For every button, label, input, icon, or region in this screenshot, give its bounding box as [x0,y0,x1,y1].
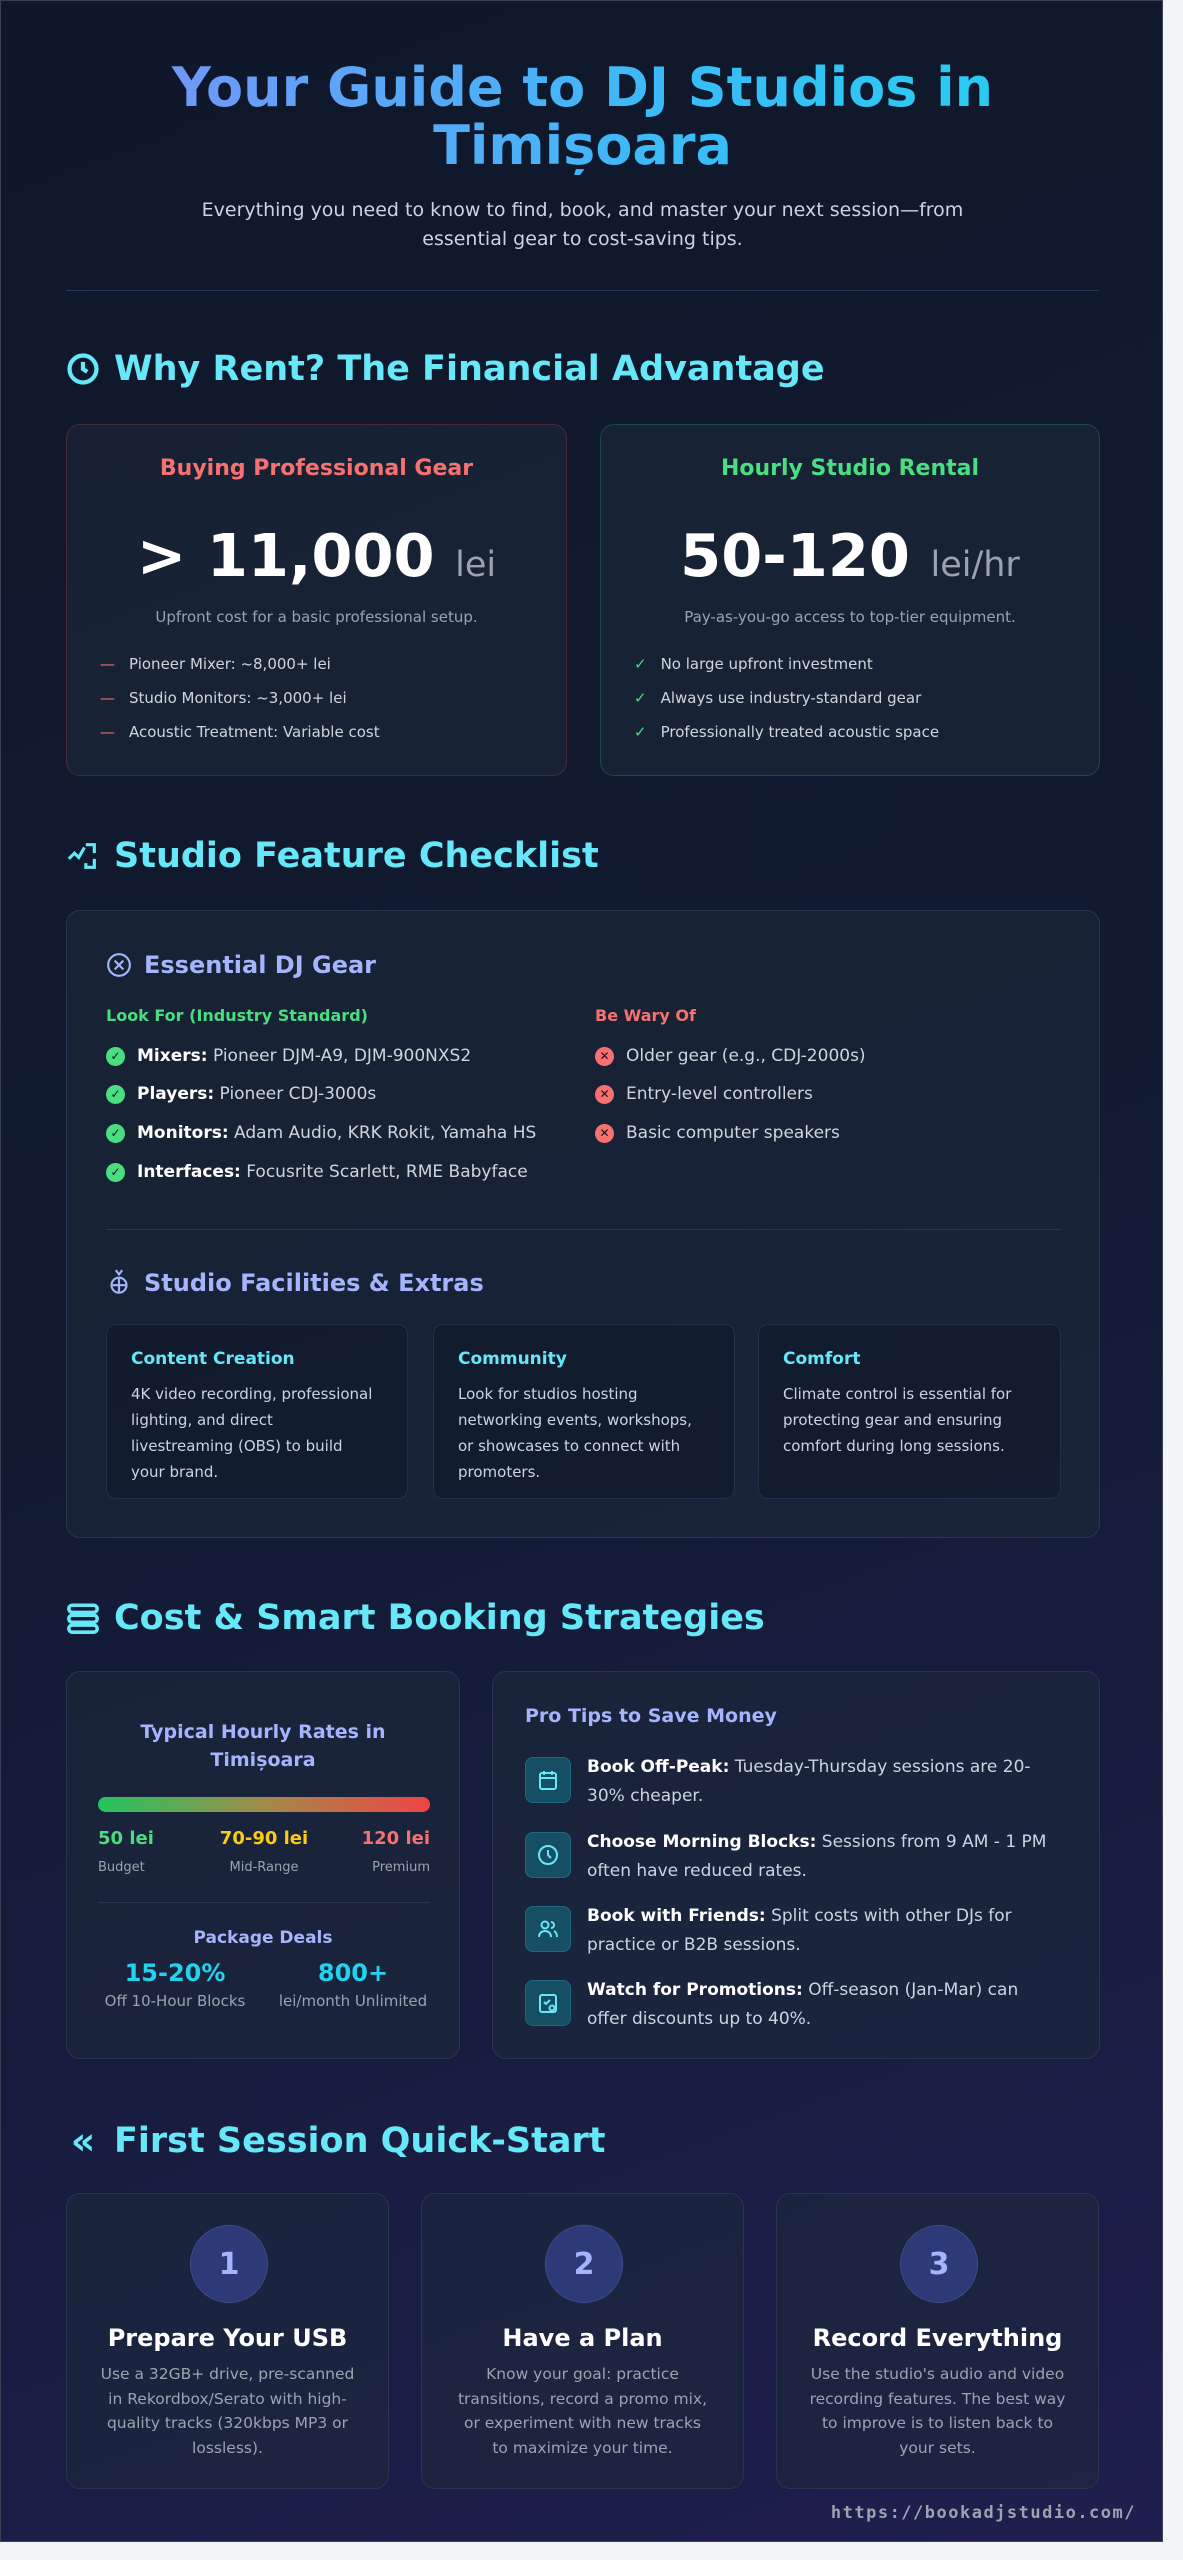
card: comfort: Climate control is essential for [783,1385,1011,1403]
look for column: Monitors: Adam Audio, KRK Rokit, Yamaha HS [137,1123,536,1143]
description: Upfront cost for a basic professional setup. [155,608,478,626]
rate labels: 120 lei [362,1828,430,1849]
be wary column: Basic computer speakers [626,1123,840,1143]
look for column: ✓ [110,1165,121,1179]
description: Pay-as-you-go access to top-tier equipment. [684,608,1016,626]
card title: Buying Professional Gear [160,456,473,481]
step 1 [66,2193,389,2489]
be wary column: Entry-level controllers [626,1084,813,1104]
card: community [433,1324,735,1499]
be wary column: Older gear (e.g., CDJ-2000s) [626,1046,866,1066]
look for column: ✓ [110,1126,121,1140]
card: comfort: comfort during long sessions. [783,1437,1005,1455]
rates title: Timișoara [210,1749,316,1771]
be wary column: ✕ [599,1049,610,1063]
heading: checklist: Studio Feature Checklist [114,836,599,876]
card: community: Look for studios hosting [458,1385,638,1403]
package deals: Package Deals [193,1928,332,1948]
be wary column [595,1006,866,1143]
rates title [140,1721,386,1771]
heading: cost strategies: Cost & Smart Booking Strategies [114,1598,765,1638]
step 1: Use a 32GB+ drive, pre-scanned in Rekordbox/Serato with high-quality tracks (320kbps MP3 or lossless). [101,2365,354,2456]
card: community: Community [458,1349,567,1369]
card title: Hourly Studio Rental [721,456,979,481]
rate labels: 50 lei [98,1828,154,1849]
look for column: Interfaces: Focusrite Scarlett, RME Babyface [137,1162,528,1182]
benefits list: ✓ [634,655,647,673]
benefits list: Always use industry-standard gear [661,689,921,707]
cost list [100,655,380,741]
heading: quick start: « [71,2119,95,2163]
tip: morning: Choose Morning Blocks: Sessions from 9 AM - 1 PM often have reduced rates. [587,1832,1046,1881]
cost list: Acoustic Treatment: Variable cost [129,723,380,741]
title: Timișoara [433,114,732,177]
subtitle: essential gear to cost-saving tips. [422,228,743,250]
panel: buying gear [66,424,567,776]
step 2 [421,2193,744,2489]
step 3: Use the studio's audio and video recording features. The best way to improve is to listen back to your sets. [810,2365,1065,2456]
card: content creation: lighting, and direct [131,1411,273,1429]
step 1: Prepare Your USB [108,2324,347,2352]
be wary column: Be Wary Of [595,1006,696,1025]
big number: > 11,000 lei [137,521,496,590]
card: comfort [758,1324,1061,1499]
card: comfort: protecting gear and ensuring [783,1411,1002,1429]
benefits list: ✓ [634,689,647,707]
cost list: Studio Monitors: ~3,000+ lei [129,689,347,707]
card: community: or showcases to connect with [458,1437,680,1455]
tip: friends: Book with Friends: Split costs with other DJs for practice or B2B sessions. [587,1906,1012,1955]
title: Your Guide to DJ Studios in [172,56,993,119]
card: comfort: Comfort [783,1349,860,1369]
tip: promotions: Watch for Promotions: Off-season (Jan-Mar) can offer discounts up to 40%. [587,1980,1018,2029]
big number: 50-120 lei/hr [680,521,1020,590]
panel: checklist [66,910,1100,1538]
card: community: promoters. [458,1463,540,1481]
rates title: Typical Hourly Rates in [140,1721,386,1743]
panel: hourly rates: 800+ [318,1959,388,1987]
look for column: Mixers: Pioneer DJM-A9, DJM-900NXS2 [137,1046,471,1066]
subheading: essential gear: Essential DJ Gear [144,951,376,979]
subtitle [202,199,963,250]
footer url: https://bookadjstudio.com/ [831,2503,1136,2523]
cost list: — [100,689,115,707]
look for column: Look For (Industry Standard) [106,1006,368,1025]
rate labels: Premium [372,1860,430,1875]
tip: off-peak: Book Off-Peak: Tuesday-Thursday sessions are 20-30% cheaper. [587,1757,1031,1806]
cost list: — [100,655,115,673]
look for column: ✓ [110,1049,121,1063]
title [1,59,1164,175]
step 2: Know your goal: practice transitions, record a promo mix, or experiment with new tracks to maximize your time. [458,2365,707,2456]
step 1: 1 [219,2246,239,2282]
card: content creation: Content Creation [131,1349,295,1369]
cost list: Pioneer Mixer: ~8,000+ lei [129,655,331,673]
look for column: ✓ [110,1087,121,1101]
panel: rental [600,424,1100,776]
be wary column: ✕ [599,1087,610,1101]
benefits list [634,655,939,741]
panel: hourly rates: Off 10-Hour Blocks [105,1992,245,2010]
card: content creation [106,1324,408,1499]
rate labels [98,1828,430,1875]
panel: hourly rates [66,1671,460,2059]
card: content creation: your brand. [131,1463,218,1481]
step 3 [776,2193,1099,2489]
panel: hourly rates: lei/month Unlimited [279,1992,427,2010]
panel: pro tips [492,1671,1100,2059]
rate labels: Mid-Range [230,1860,298,1875]
step 2: Have a Plan [502,2324,663,2352]
be wary column: ✕ [599,1126,610,1140]
heading: quick start: First Session Quick-Start [114,2121,605,2161]
step 3: Record Everything [813,2324,1062,2352]
tips title: Pro Tips to Save Money [525,1705,777,1727]
benefits list: ✓ [634,723,647,741]
rate labels: 70-90 lei [220,1828,308,1849]
step 2: 2 [574,2246,594,2282]
look for column: Players: Pioneer CDJ-3000s [137,1084,376,1104]
card: community: networking events, workshops, [458,1411,692,1429]
heading: why rent: Why Rent? The Financial Advantage [114,349,825,389]
rate labels: Budget [98,1860,145,1875]
gradient bar [98,1797,430,1812]
subheading: facilities: Studio Facilities & Extras [144,1269,484,1297]
benefits list: Professionally treated acoustic space [661,723,939,741]
panel: hourly rates: 15-20% [125,1959,225,1987]
step 3: 3 [929,2246,949,2282]
look for column [106,1006,536,1182]
card: content creation: 4K video recording, professional [131,1385,372,1403]
benefits list: No large upfront investment [661,655,873,673]
subtitle: Everything you need to know to find, book, and master your next session—from [202,199,963,221]
card: content creation: livestreaming (OBS) to build [131,1437,343,1455]
cost list: — [100,723,115,741]
